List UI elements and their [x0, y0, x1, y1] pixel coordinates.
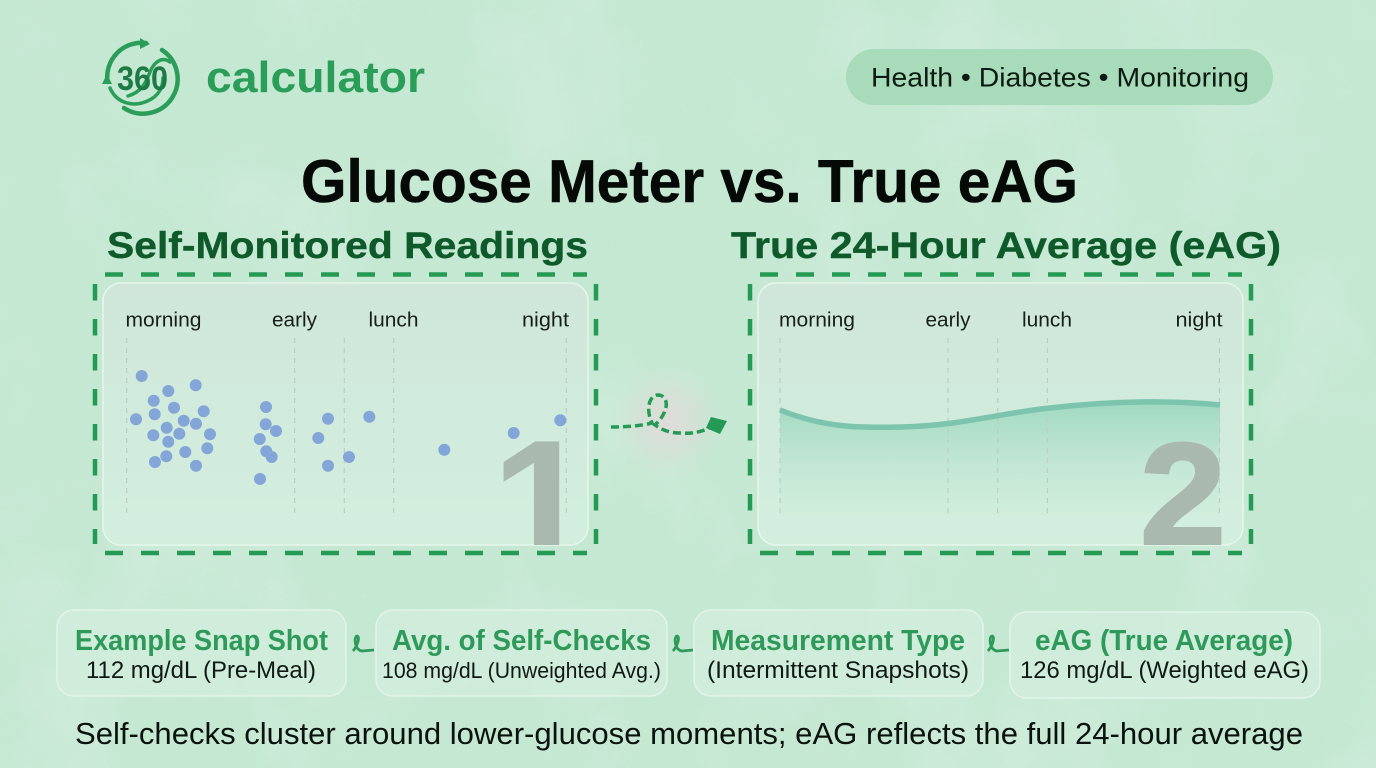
wordmark: calculator — [206, 53, 425, 102]
big number 2: 2 — [1140, 413, 1226, 576]
time labels — [779, 308, 1223, 332]
time labels: night — [1176, 308, 1223, 332]
stat card: example snapshot: Example Snap Shot — [75, 625, 328, 657]
time labels — [126, 308, 569, 332]
scatter dots: self-checks — [130, 370, 566, 485]
panel card — [103, 283, 588, 545]
stat card: eAG true average: 126 mg/dL (Weighted eAG) — [1020, 657, 1309, 684]
stat card: example snapshot — [57, 610, 346, 696]
takeaway caption: Self-checks cluster around lower-glucose moments; eAG reflects the full 24-hour average — [75, 716, 1303, 751]
stat card: measurement type: Measurement Type — [711, 625, 965, 657]
connector — [988, 636, 1009, 651]
icon: 360 circular arrows — [102, 38, 178, 114]
stat card: example snapshot: 112 mg/dL (Pre-Meal) — [86, 657, 316, 684]
logo: 360 calculator — [102, 38, 425, 114]
connector — [353, 636, 374, 651]
time labels: early — [272, 308, 318, 332]
arrow: loop between panels — [606, 360, 730, 484]
time labels: lunch — [368, 308, 418, 332]
time labels: morning — [779, 308, 855, 332]
stat card: eAG true average — [1010, 612, 1320, 698]
time labels: early — [926, 308, 971, 332]
area under curve — [780, 402, 1220, 515]
big number 1: 1 — [491, 401, 593, 607]
stat card: measurement type — [694, 610, 983, 696]
stat card: average of self-checks — [376, 610, 667, 696]
eAG curve — [780, 402, 1220, 427]
icon: 360 circular arrows: 360 — [117, 60, 168, 98]
time labels: night — [522, 308, 569, 332]
time labels: lunch — [1022, 308, 1072, 332]
stat card: measurement type: (Intermittent Snapshots) — [707, 657, 969, 684]
connector — [673, 636, 693, 651]
heading: true 24-hour average: True 24-Hour Average (eAG) — [731, 225, 1281, 266]
category pill — [846, 49, 1273, 105]
heading: self-monitored readings: Self-Monitored Readings — [107, 225, 588, 266]
dashed frame — [750, 274, 1251, 553]
dashed frame — [95, 274, 596, 553]
stat card: average of self-checks: 108 mg/dL (Unweighted Avg.) — [382, 658, 661, 683]
panel: self-monitored readings — [92, 272, 598, 556]
stat card: average of self-checks: Avg. of Self-Checks — [392, 625, 651, 657]
time labels: morning — [126, 308, 202, 332]
panel card — [758, 283, 1243, 545]
category pill: Health • Diabetes • Monitoring — [871, 62, 1249, 92]
panel: true 24-hour average — [750, 274, 1251, 576]
stat card: eAG true average: eAG (True Average) — [1035, 625, 1293, 657]
title: Glucose Meter vs. True eAG — [301, 148, 1078, 215]
